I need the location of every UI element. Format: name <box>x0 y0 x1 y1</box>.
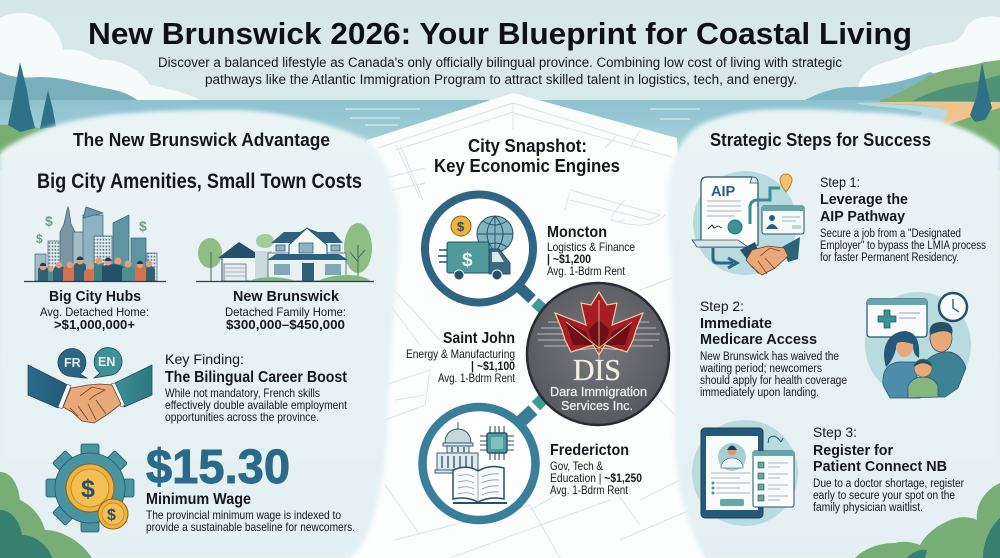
logo: Dara Immigration Services badge: Services Inc. <box>561 399 633 413</box>
icon: big city skyline with crowd: $ <box>139 218 147 234</box>
stat: minimum wage 15.30: $15.30 <box>146 441 290 494</box>
text: moncton: Avg. 1-Bdrm Rent <box>547 264 626 278</box>
icon: tablet with doctor profile and checklist <box>692 420 798 526</box>
text: step 2: waiting period; newcomers <box>699 363 822 375</box>
caption: big city hubs: Big City Hubs <box>49 289 141 305</box>
icon: handshake with FR and EN speech bubbles: FR <box>64 356 81 370</box>
heading: the new brunswick advantage: The New Brunswick Advantage <box>73 130 330 150</box>
logo: Dara Immigration Services badge <box>527 283 669 425</box>
icon: gear with dollar coins: $ <box>81 475 95 503</box>
text: saint john: | ~$1,100 <box>471 359 515 373</box>
icon: moncton magnifier with truck and globe: $ <box>462 250 473 271</box>
text: step 2: Medicare Access <box>700 331 817 348</box>
text: step 3: Due to a doctor shortage, register <box>813 478 964 490</box>
icon: big city skyline with crowd: $ <box>36 232 43 246</box>
text: step 1: AIP Pathway <box>820 208 906 225</box>
icon: gear with dollar coins <box>46 444 134 532</box>
icon: gear with dollar coins: $ <box>107 507 116 524</box>
heading: city snapshot <box>434 135 620 176</box>
text: step 3: Step 3: <box>813 424 857 440</box>
text: step 1 <box>820 174 986 264</box>
icon: moncton magnifier with truck and globe: $ <box>457 219 465 234</box>
caption: new brunswick: Detached Family Home: <box>225 305 346 319</box>
text: saint john: Saint John <box>443 330 515 347</box>
stat: minimum wage 15.30: Minimum Wage <box>146 491 251 508</box>
text: step 1: Secure a job from a "Designated <box>820 228 961 240</box>
text: fredericton: Education | ~$1,250 <box>550 471 642 485</box>
text: key finding bilingual career boost: The Bilingual Career Boost <box>165 369 347 386</box>
text: step 2: Immediate <box>700 315 772 332</box>
text: step 2: New Brunswick has waived the <box>700 351 839 363</box>
text: step 3: family physician waitlist. <box>813 502 923 514</box>
icon: big city skyline with crowd <box>24 207 166 282</box>
text: saint john <box>406 330 516 385</box>
caption: big city hubs <box>40 289 149 332</box>
icon: fredericton magnifier with capitol, chip and book <box>422 407 536 520</box>
text: step 2: immediately upon landing. <box>700 387 819 399</box>
text: step 1: Step 1: <box>820 174 860 190</box>
icon: detached family house with trees <box>196 223 374 282</box>
title: New Brunswick 2026: Your Blueprint for Coastal Living <box>88 16 912 51</box>
text: moncton: | ~$1,200 <box>547 252 591 266</box>
subtitle: pathways like the Atlantic Immigration Program to attract skilled talent in logistics, tech, and energy. <box>205 72 797 87</box>
caption: new brunswick <box>225 289 346 332</box>
text: key finding bilingual career boost <box>165 351 348 424</box>
text: step 3: Register for <box>813 442 893 459</box>
text: saint john: Energy & Manufacturing <box>406 347 515 361</box>
text: fredericton: Gov, Tech & <box>550 459 603 473</box>
text: saint john: Avg. 1-Bdrm Rent <box>438 371 516 385</box>
panel: right strategic steps <box>667 109 1000 558</box>
text: step 3: Patient Connect NB <box>813 458 947 475</box>
panel: left advantage <box>0 110 400 558</box>
text: fredericton <box>550 442 642 497</box>
text: key finding bilingual career boost: opportunities across the province. <box>165 410 319 424</box>
text: step 2: should apply for health coverage <box>700 375 847 387</box>
text: step 3: early to secure your spot on the <box>813 490 955 502</box>
text: key finding bilingual career boost: effectively double available employment <box>165 398 348 412</box>
heading: city snapshot: Key Economic Engines <box>434 155 620 176</box>
icon: handshake with FR and EN speech bubbles: EN <box>98 355 115 369</box>
caption: new brunswick: $300,000–$450,000 <box>226 318 345 332</box>
logo: Dara Immigration Services badge: DIS <box>573 352 621 387</box>
text: step 1: for faster Permanent Residency. <box>820 252 959 264</box>
heading: strategic steps for success: Strategic Steps for Success <box>710 130 931 150</box>
icon: moncton magnifier with truck and globe <box>425 194 533 302</box>
foliage: bottom right bush <box>855 483 1000 558</box>
subtitle <box>158 55 842 87</box>
text: fredericton: Avg. 1-Bdrm Rent <box>550 483 629 497</box>
heading: city snapshot: City Snapshot: <box>468 135 587 156</box>
text: step 2: Step 2: <box>700 298 744 314</box>
icon: red maple leaf <box>555 292 643 362</box>
panel: centre blueprint <box>345 93 705 558</box>
text: key finding bilingual career boost: While not mandatory, French skills <box>165 386 320 400</box>
text: moncton: Logistics & Finance <box>547 240 635 254</box>
stat: minimum wage 15.30: provide a sustainable baseline for newcomers. <box>146 520 355 534</box>
text: step 3 <box>813 424 964 514</box>
stat: minimum wage 15.30: The provincial minimum wage is indexed to <box>146 508 341 522</box>
icon: AIP document, card and handshake <box>692 171 804 275</box>
caption: new brunswick: New Brunswick <box>233 289 340 305</box>
logo: Dara Immigration Services badge: Dara Immigration <box>550 385 647 399</box>
icon: big city skyline with crowd: $ <box>45 213 53 229</box>
text: moncton <box>547 224 635 278</box>
icon: AIP document, card and handshake: AIP <box>711 184 736 200</box>
icon: connector handles <box>517 285 553 425</box>
text: step 1: Leverage the <box>820 191 908 208</box>
foliage: bottom left bush <box>0 472 92 558</box>
text: key finding bilingual career boost: Key Finding: <box>165 351 244 367</box>
text: moncton: Moncton <box>547 224 607 241</box>
icon: family with medicare card and clock <box>865 292 971 398</box>
heading: big city amenities: Big City Amenities, Small Town Costs <box>37 169 362 193</box>
icon: handshake with FR and EN speech bubbles <box>28 348 152 423</box>
text: step 2 <box>699 298 847 399</box>
caption: big city hubs: >$1,000,000+ <box>54 318 135 332</box>
text: fredericton: Fredericton <box>550 442 629 459</box>
subtitle: Discover a balanced lifestyle as Canada's only officially bilingual province. Combining low cost of living with strategic <box>158 55 842 70</box>
caption: big city hubs: Avg. Detached Home: <box>40 305 149 319</box>
stat: minimum wage 15.30 <box>146 441 355 534</box>
